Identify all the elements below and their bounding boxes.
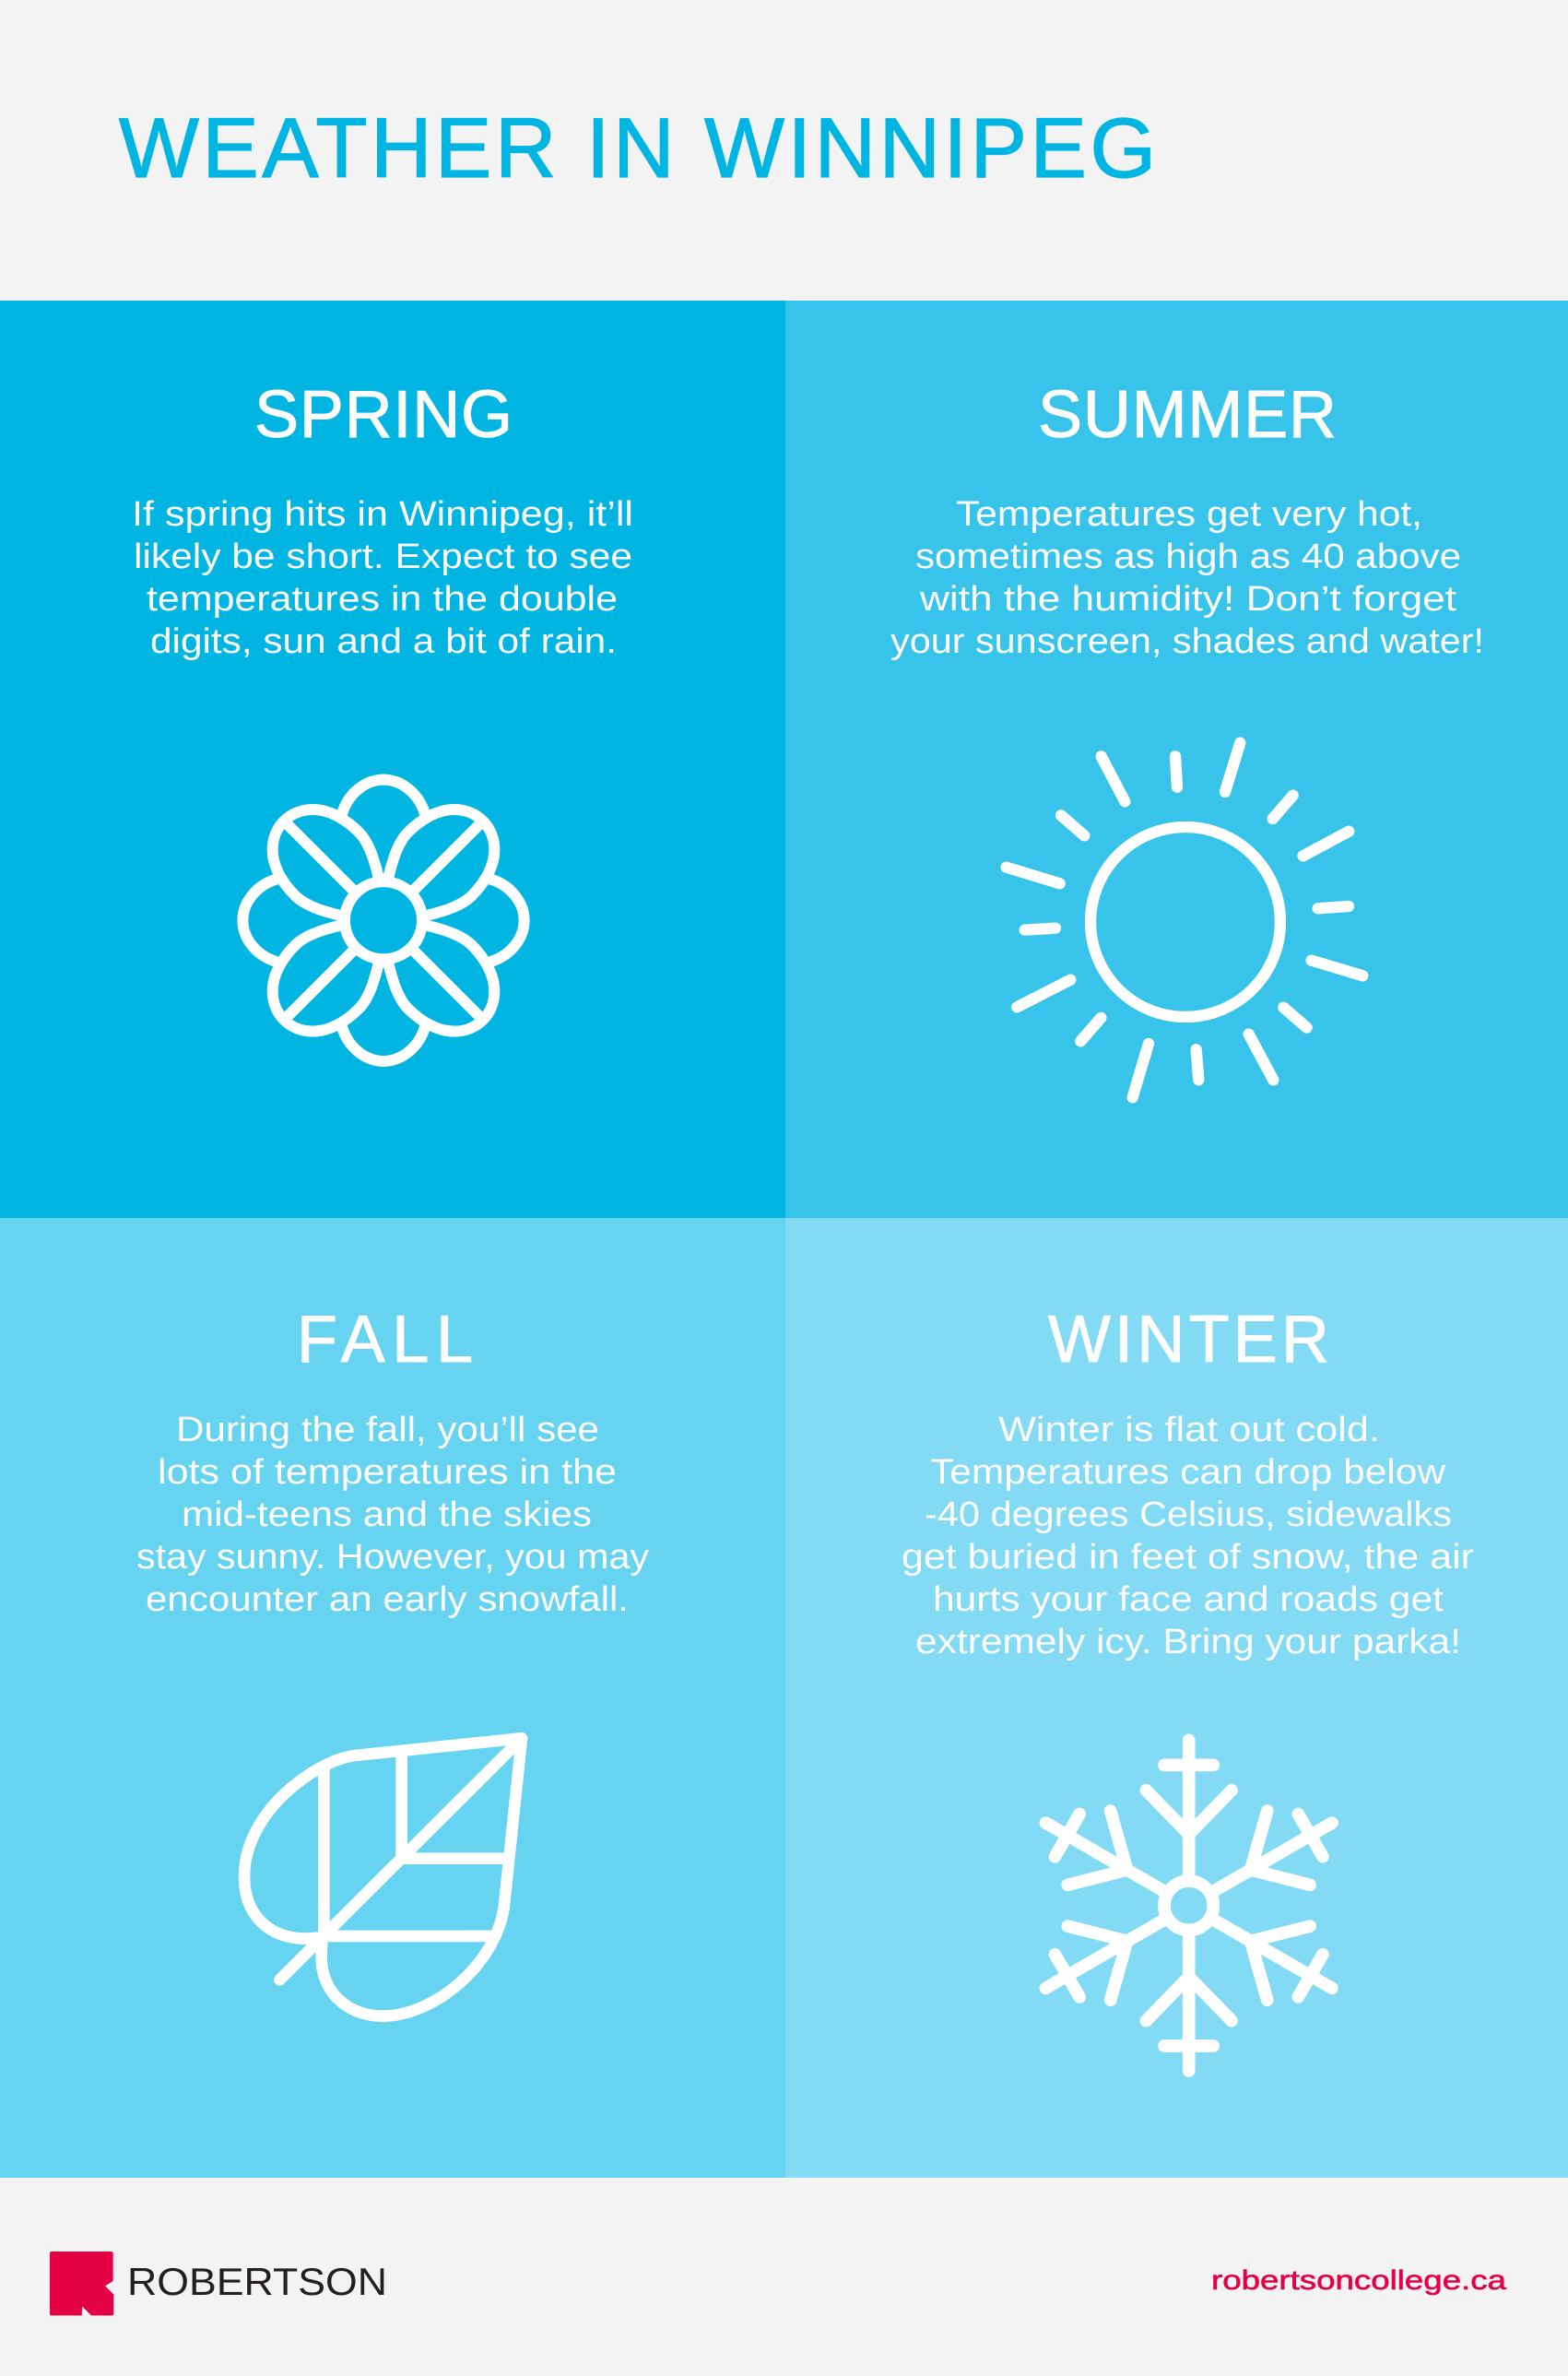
text block: winter: -40 degrees Celsius, sidewalks (925, 1495, 1452, 1534)
text block: fall: lots of temperatures in the (158, 1453, 617, 1492)
text block: spring: likely be short. Expect to see (134, 538, 632, 576)
heading: fall: FALL (297, 1303, 473, 1377)
text block: fall: mid-teens and the skies (182, 1495, 592, 1534)
text block: summer: with the humidity! Don’t forget (919, 580, 1457, 619)
panel: winter (785, 1218, 1568, 2178)
text block: spring: temperatures in the double (147, 580, 618, 619)
text block: winter: Winter is flat out cold. (998, 1411, 1380, 1449)
panel: summer (785, 301, 1568, 1218)
wordmark: ROBERTSON (127, 2260, 387, 2303)
text block: winter: get buried in feet of snow, the air (902, 1538, 1474, 1577)
text block: summer: sometimes as high as 40 above (915, 538, 1461, 576)
icon: logo mark (50, 2252, 113, 2315)
text block: fall: stay sunny. However, you may (136, 1538, 649, 1577)
heading: summer: SUMMER (1038, 378, 1337, 452)
icon: flower (242, 780, 525, 1061)
website url: robertsoncollege.ca (1211, 2265, 1506, 2296)
text block: summer (890, 495, 1484, 661)
title: WEATHER IN WINNIPEG (119, 101, 1156, 195)
text block: spring: If spring hits in Winnipeg, it’ll (132, 495, 633, 534)
text block: fall: encounter an early snowfall. (146, 1580, 629, 1619)
text block: spring: digits, sun and a bit of rain. (150, 622, 617, 661)
icon: leaf (244, 1738, 522, 2016)
panel: fall (0, 1218, 785, 2178)
text block: summer: your sunscreen, shades and water! (890, 622, 1484, 661)
text block: fall (136, 1411, 649, 1619)
text block: spring (132, 495, 633, 661)
heading: winter: WINTER (1048, 1303, 1329, 1377)
icon: snowflake (1024, 1740, 1353, 2071)
text block: fall: During the fall, you’ll see (176, 1411, 599, 1449)
panel: spring (0, 301, 785, 1218)
text block: winter: extremely icy. Bring your parka! (915, 1623, 1461, 1661)
text block: winter: hurts your face and roads get (933, 1580, 1444, 1619)
heading: spring: SPRING (254, 378, 513, 452)
logo: Robertson (50, 2252, 387, 2315)
text block: summer: Temperatures get very hot, (956, 495, 1422, 534)
text block: winter (902, 1411, 1474, 1661)
text block: winter: Temperatures can drop below (930, 1453, 1446, 1492)
icon: sun (1007, 743, 1362, 1097)
